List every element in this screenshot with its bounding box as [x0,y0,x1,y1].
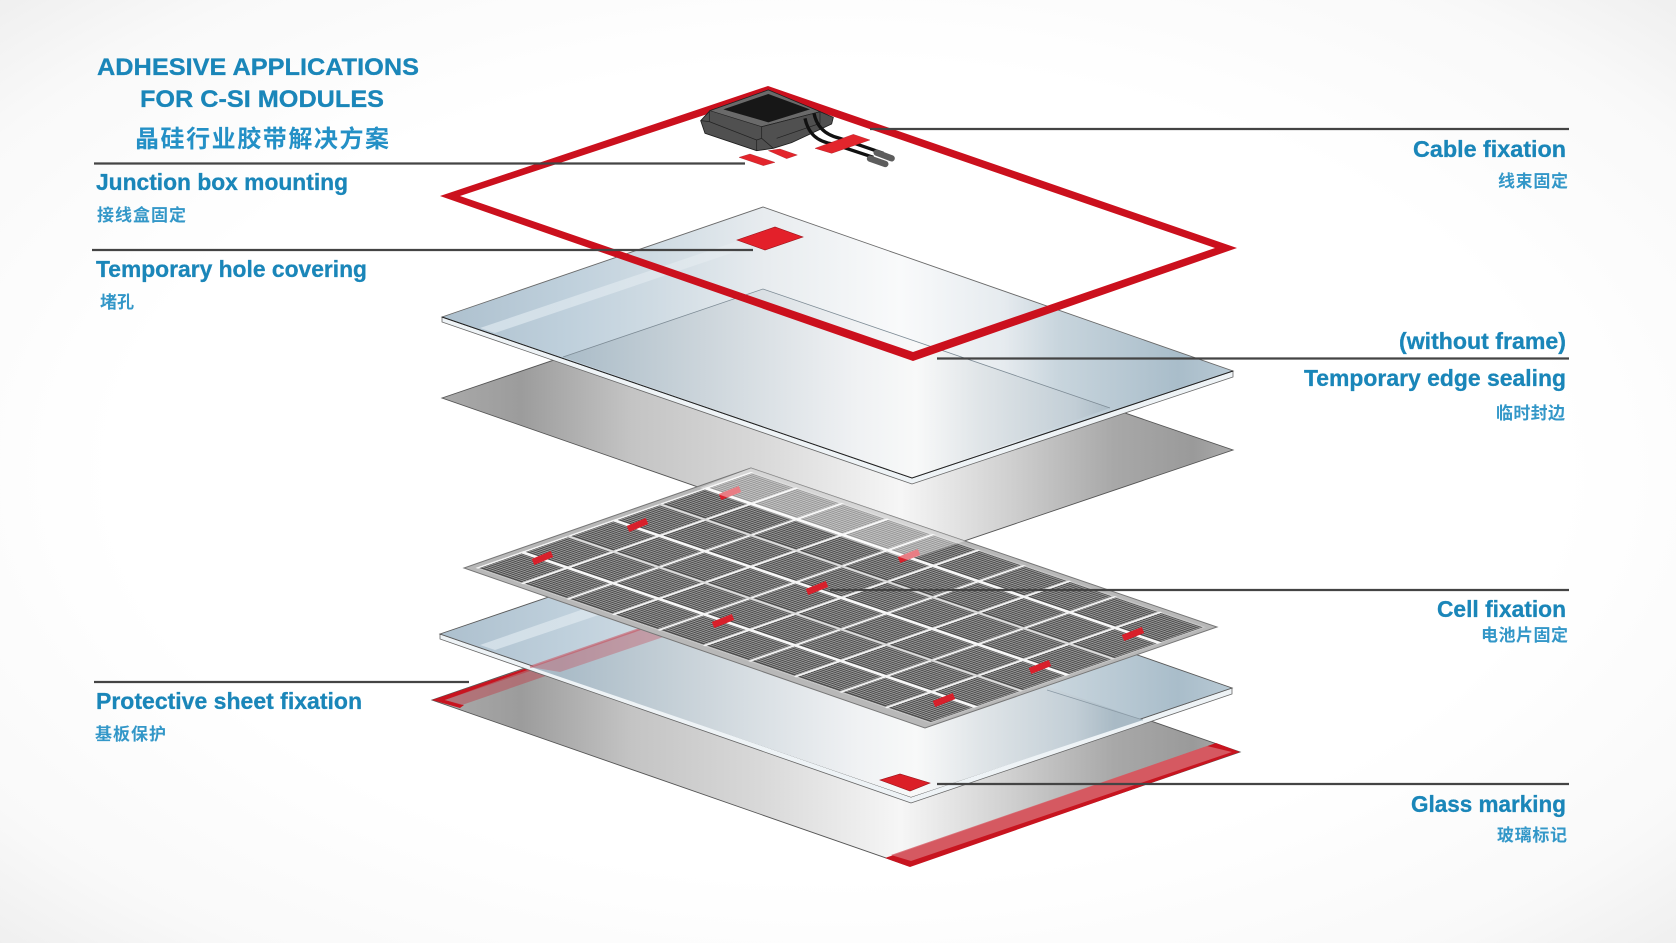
cable fixation tab [815,134,870,153]
label: protective sheet fixation: Protective sheet fixation [96,688,362,714]
leader line: edge sealing [937,357,1569,360]
label: junction box mounting: 接线盒固定 [97,205,186,225]
title: FOR C-SI MODULES [140,86,384,113]
leader line: glass marking [937,783,1569,785]
junction box with cables [701,90,892,166]
label: temporary edge sealing [1304,328,1566,423]
label: cable fixation [1413,136,1568,191]
red cell fixation tabs [533,489,1143,704]
title [97,54,419,153]
label: cell fixation [1437,596,1568,645]
title: 晶硅行业胶带解决方案 [135,125,389,153]
label: junction box mounting: Junction box mounting [96,169,348,195]
label: temporary hole covering: 堵孔 [100,293,134,312]
box body [701,90,833,151]
leader line: cell fixation [830,589,1569,591]
translucent sheet overlap [700,468,965,560]
label: temporary edge sealing: Temporary edge sealing [1304,365,1566,391]
lower glass layer [440,524,1232,803]
faded strip seen through glass [530,622,690,672]
label: glass marking: 玻璃标记 [1497,825,1567,845]
red adhesive strip: left [432,667,560,708]
leader line: hole covering [92,249,753,251]
label: temporary edge sealing: 临时封边 [1496,403,1565,423]
label: temporary edge sealing: (without frame) [1399,328,1566,354]
cell grid [475,472,1206,723]
red adhesive strip: lower right [885,743,1240,867]
leader line: cable fixation [870,128,1569,130]
solar cell panel [464,468,1217,728]
label: protective sheet fixation [95,688,362,744]
leader line: junction box [94,162,745,165]
label: protective sheet fixation: 基板保护 [95,725,166,744]
upper glass layer [442,207,1233,484]
junction box tabs [739,149,797,166]
bottom backsheet layer [432,586,1240,867]
label: cell fixation: Cell fixation [1437,596,1566,622]
label: temporary hole covering [96,256,367,312]
glass marking tab [880,774,930,791]
cables and connectors [805,113,892,164]
temporary hole covering tab [737,227,803,250]
label: cell fixation: 电池片固定 [1481,625,1568,645]
title: ADHESIVE APPLICATIONS [97,54,419,81]
label: cable fixation: Cable fixation [1413,136,1566,162]
red edge sealing frame [440,86,1237,361]
label: glass marking: Glass marking [1411,791,1566,817]
label: cable fixation: 线束固定 [1498,171,1568,191]
label: glass marking [1411,791,1567,845]
label: temporary hole covering: Temporary hole covering [96,256,367,282]
leader line: protective sheet [94,681,469,683]
label: junction box mounting [96,169,348,225]
encapsulant sheet layer [442,289,1233,560]
